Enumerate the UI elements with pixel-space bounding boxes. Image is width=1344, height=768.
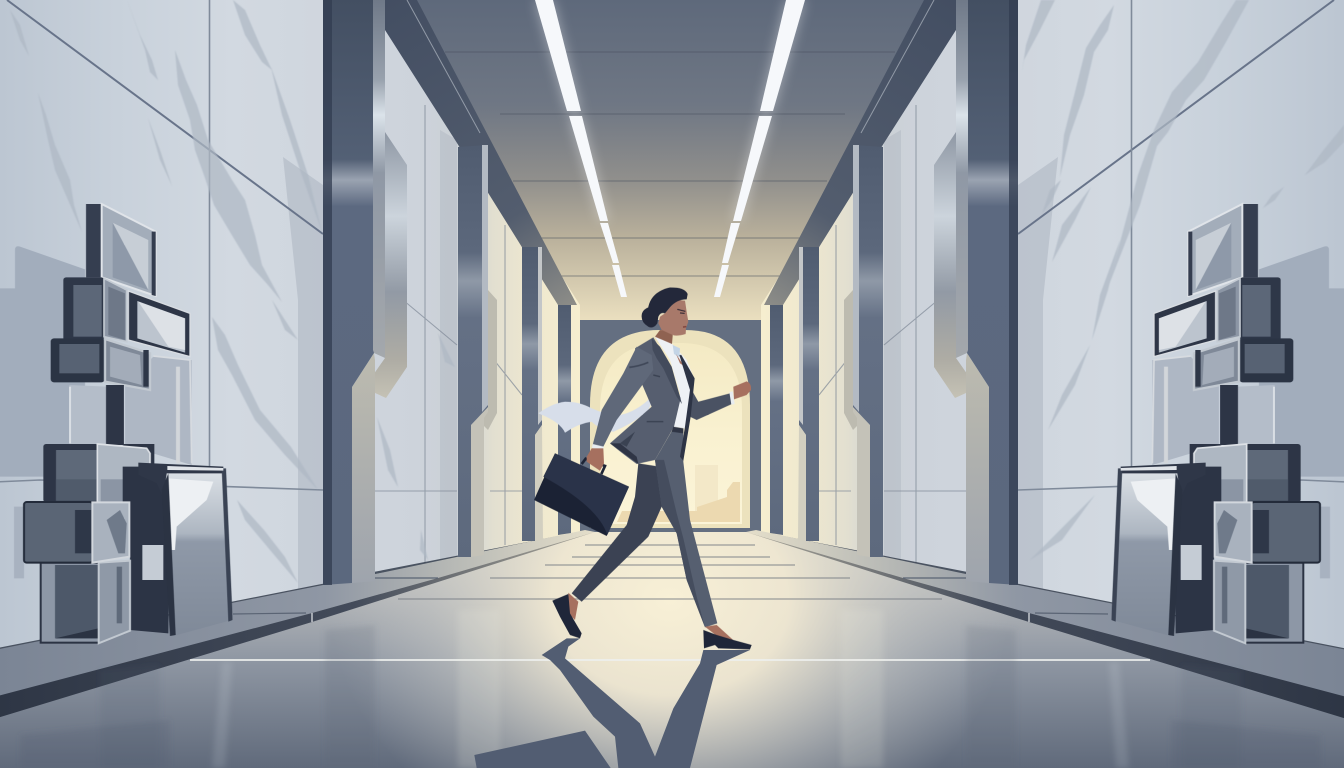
large cube lower left bbox=[24, 502, 130, 643]
column bbox=[106, 385, 124, 445]
sculpture: right glass cubes (mirror of left) bbox=[1111, 204, 1344, 643]
ankles bbox=[568, 593, 734, 641]
window box bbox=[128, 291, 190, 357]
end wall with glowing arch bbox=[574, 320, 768, 532]
dark back block bbox=[123, 467, 170, 633]
cast shadows bbox=[0, 246, 85, 578]
hand bbox=[587, 448, 604, 471]
back leg bbox=[572, 463, 662, 602]
head and neck bbox=[642, 287, 688, 344]
pillar 1 bbox=[323, 0, 407, 585]
ceiling beam bbox=[385, 0, 577, 305]
glass pane behind bbox=[69, 356, 192, 465]
woman walking with briefcase bbox=[534, 287, 752, 649]
far arm and fist bbox=[690, 381, 751, 420]
pillar 3 bbox=[522, 247, 543, 541]
jacket bbox=[610, 337, 695, 464]
shoes bbox=[552, 594, 752, 649]
marble veins bbox=[10, 0, 1344, 583]
lower upper cube bbox=[43, 444, 154, 502]
leaning glass pane bbox=[138, 463, 233, 636]
floor bbox=[0, 520, 1344, 768]
pillar 4 bbox=[558, 305, 571, 535]
top frame bbox=[86, 204, 156, 296]
briefcase bbox=[534, 453, 629, 536]
middle cube bbox=[51, 338, 150, 390]
wall panels bbox=[0, 0, 580, 650]
sculpture: left glass cubes bbox=[0, 204, 233, 643]
walkway with curb bbox=[0, 530, 595, 719]
floor reflection streaks bbox=[20, 610, 500, 768]
left wall half bbox=[0, 0, 595, 768]
right wall half (mirror of left) bbox=[746, 0, 1344, 768]
upper cube bbox=[63, 277, 127, 342]
white shirt bbox=[655, 337, 694, 428]
pillar 2 bbox=[458, 145, 497, 557]
front leg bbox=[655, 428, 717, 627]
reflection of the woman on the floor bbox=[474, 638, 750, 768]
near arm bbox=[592, 347, 653, 450]
ceiling bbox=[410, 0, 931, 322]
ceiling light strips bbox=[535, 0, 805, 297]
flowing scarf bbox=[538, 397, 652, 433]
distant city bbox=[617, 465, 740, 522]
